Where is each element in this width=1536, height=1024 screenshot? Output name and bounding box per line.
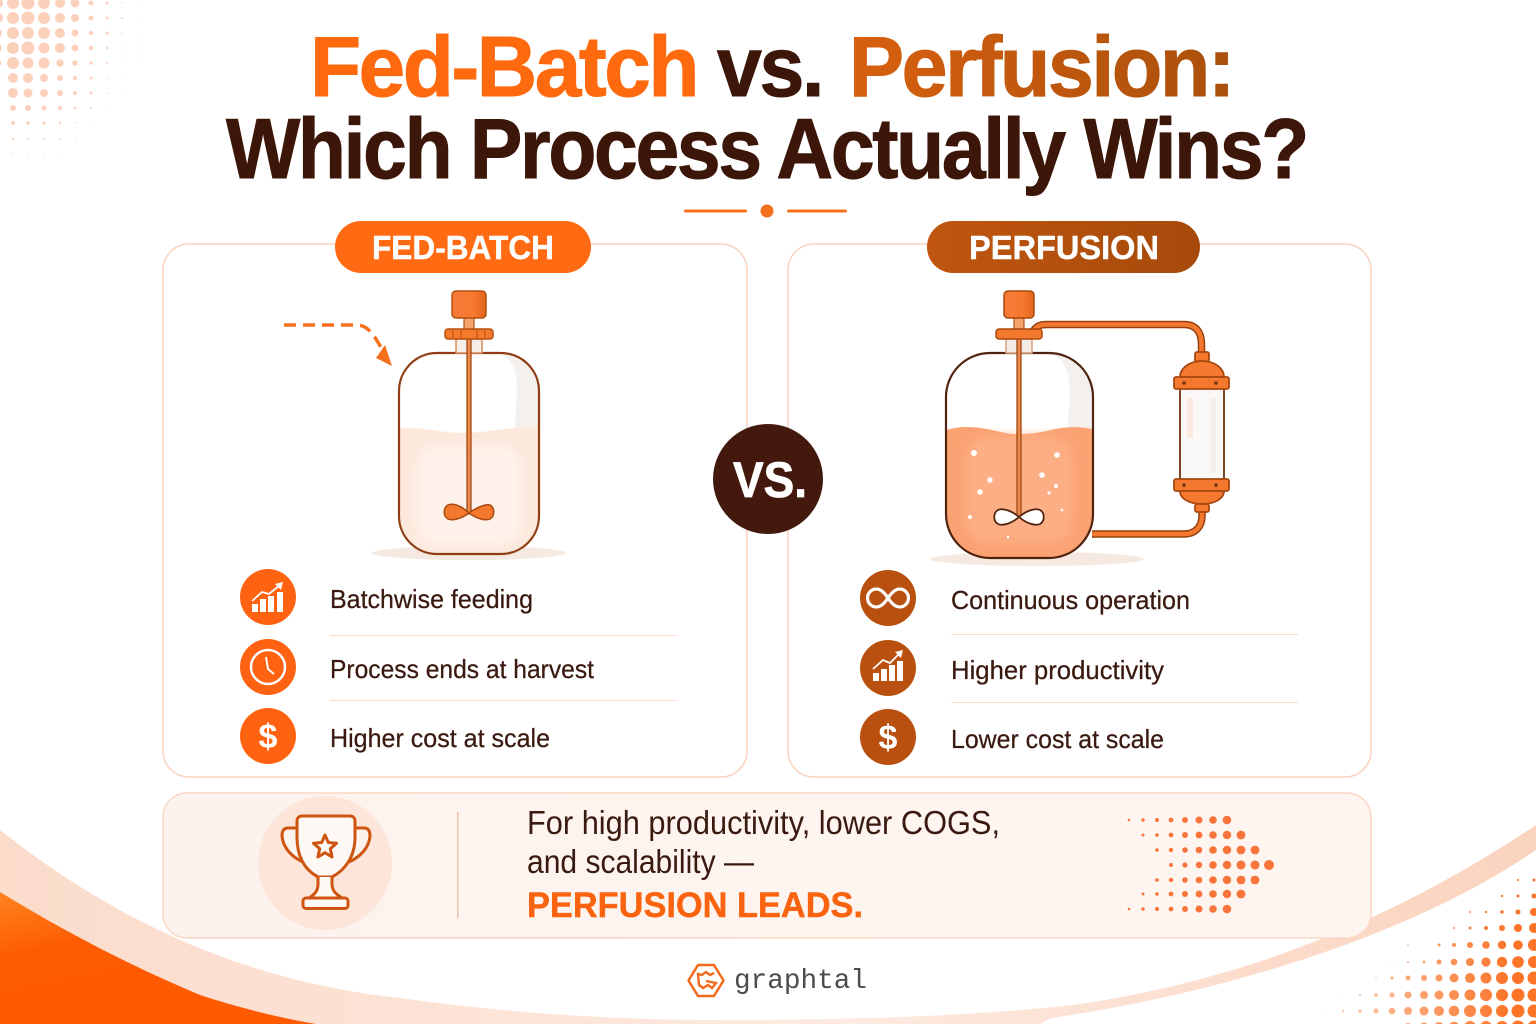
- fed-batch label pill: FED-BATCH: [372, 229, 554, 266]
- icon: growth chart: [240, 569, 296, 625]
- verdict text: [527, 804, 1000, 925]
- continuous operation label: Continuous operation: [951, 585, 1190, 615]
- verdict text: For high productivity, lower COGS,: [527, 804, 1000, 841]
- icon: dollar: [860, 709, 916, 765]
- icon: trophy: [258, 796, 392, 930]
- background swoosh: light band: [0, 825, 1536, 1024]
- icon: infinity: [860, 570, 916, 626]
- batchwise feeding label: Batchwise feeding: [330, 584, 533, 614]
- title: Perfusion:: [849, 20, 1233, 115]
- higher productivity label: Higher productivity: [951, 655, 1164, 685]
- decorative halftone bottom-right: [1326, 878, 1536, 1024]
- filter column: [1174, 352, 1229, 512]
- title: Which Process Actually Wins?: [226, 102, 1307, 197]
- halftone arrow: [1128, 816, 1274, 913]
- higher cost label: Higher cost at scale: [330, 723, 550, 753]
- title: Fed-Batch: [310, 20, 697, 115]
- background swoosh: solid orange corner: [0, 892, 316, 1024]
- verdict text: PERFUSION LEADS.: [527, 886, 863, 925]
- recirculation pipes: [1032, 324, 1202, 534]
- process ends label: Process ends at harvest: [330, 654, 595, 684]
- perfusion bioreactor: [930, 291, 1144, 566]
- icon: growth chart: [860, 640, 916, 696]
- icon: dollar: $: [259, 718, 278, 756]
- lower cost label: Lower cost at scale: [951, 724, 1164, 754]
- title: vs.: [717, 20, 822, 115]
- icon: clock: [240, 639, 296, 695]
- verdict text: and scalability —: [527, 843, 754, 880]
- fed-batch feature icons and text: [240, 569, 677, 764]
- feed arrow: [284, 325, 392, 366]
- title divider: [684, 204, 847, 218]
- perfusion label pill: [927, 221, 1200, 273]
- panel: verdict: [163, 793, 1371, 938]
- icon: dollar: [240, 708, 296, 764]
- brand logo: graphtal: [734, 966, 867, 997]
- vs badge: [713, 424, 823, 534]
- decorative halftone top-left: [0, 0, 138, 155]
- perfusion feature icons and text: [860, 570, 1298, 765]
- vs badge: VS.: [733, 452, 807, 508]
- perfusion label pill: PERFUSION: [969, 229, 1159, 266]
- panel: perfusion: [788, 221, 1371, 777]
- title: [226, 20, 1307, 197]
- fed-batch bioreactor: [372, 291, 566, 560]
- fed-batch label pill: [335, 221, 591, 273]
- icon: dollar: $: [879, 719, 898, 757]
- panel: fed-batch: [163, 221, 747, 777]
